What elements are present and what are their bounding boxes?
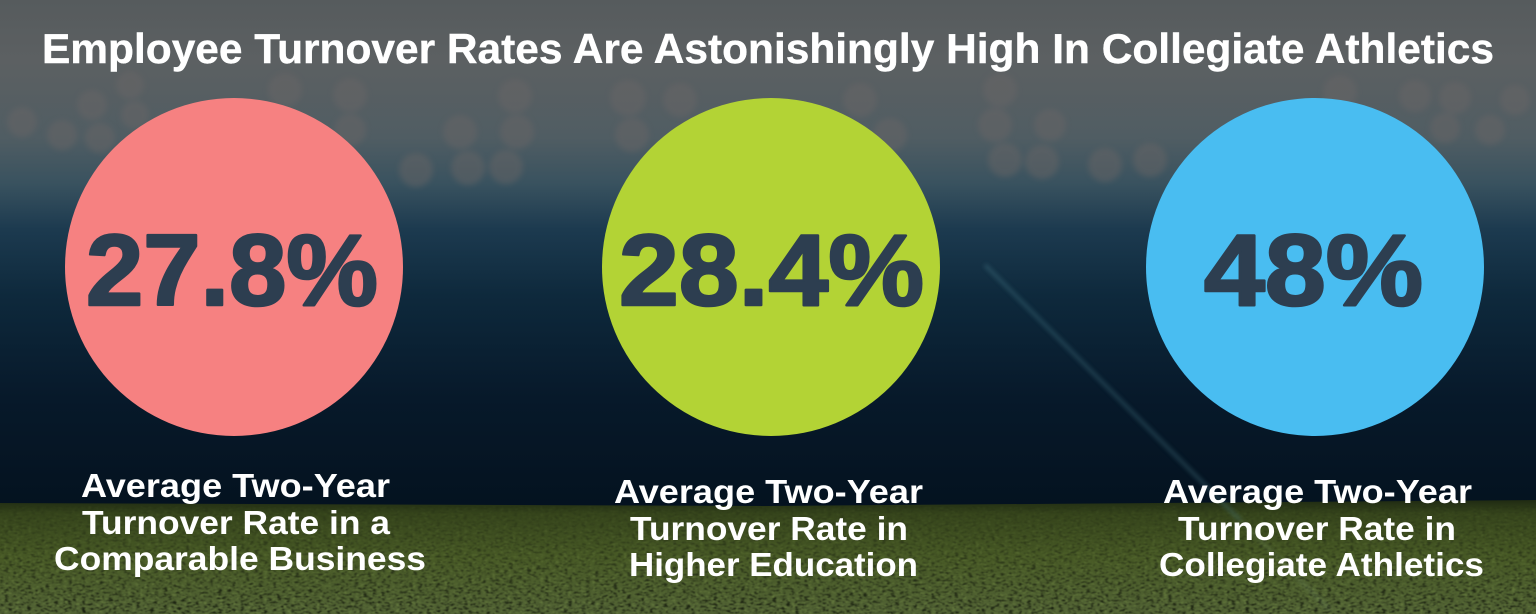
label: comparable business: Average Two-Year (81, 467, 390, 504)
background: grass light texture (0, 518, 1536, 614)
circle: green (602, 98, 940, 436)
background: blurred stadium lights (7, 71, 1530, 187)
label: collegiate athletics: Collegiate Athletics (1159, 546, 1484, 583)
label: comparable business (54, 467, 426, 577)
label: collegiate athletics: Average Two-Year (1163, 473, 1472, 510)
stat: 48%: 48% (1204, 215, 1423, 327)
stat: 27.8%: 27.8% (86, 215, 378, 327)
panel: collegiate athletics (1146, 98, 1484, 583)
background: grass field (0, 500, 1536, 614)
label: higher education: Turnover Rate in (630, 510, 908, 547)
label: comparable business: Turnover Rate in a (82, 504, 391, 541)
label: higher education: Average Two-Year (614, 473, 923, 510)
panel: comparable business (54, 98, 426, 577)
title: Employee Turnover Rates Are Astonishingly High In Collegiate Athletics (42, 25, 1494, 72)
label: comparable business: Comparable Business (54, 540, 426, 577)
label: higher education (614, 473, 923, 583)
background: grass dark texture (0, 506, 1536, 614)
circle: pink (65, 98, 403, 436)
label: collegiate athletics (1159, 473, 1484, 583)
stat: 28.4%: 28.4% (619, 215, 924, 327)
label: higher education: Higher Education (629, 546, 918, 583)
label: collegiate athletics: Turnover Rate in (1178, 510, 1456, 547)
background: lens light streak (985, 265, 1330, 610)
circle: blue (1146, 98, 1484, 436)
panel: higher education (602, 98, 940, 583)
